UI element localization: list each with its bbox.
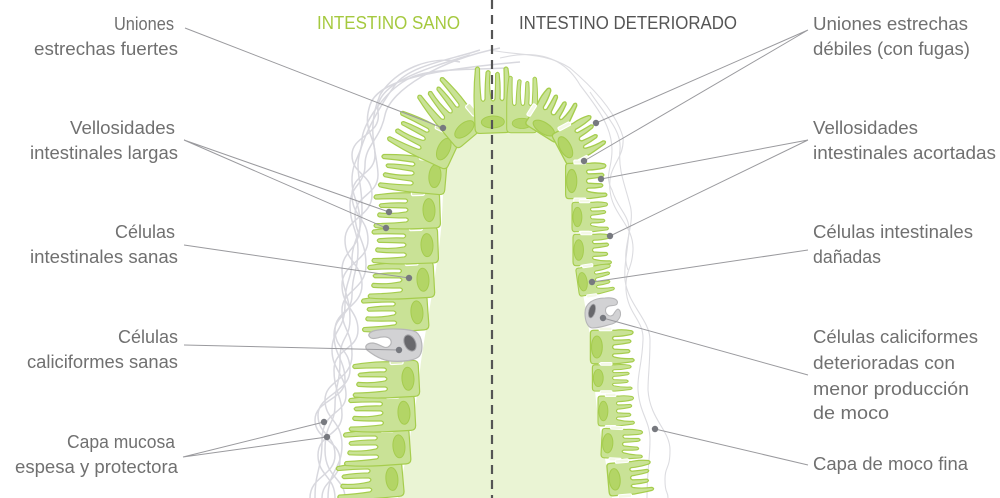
callout: damaged goblet cells: Células caliciformes: [813, 327, 978, 347]
callout: damaged goblet cells: de moco: [813, 403, 889, 423]
callout: healthy intestinal cells: [30, 222, 412, 281]
damaged cell 7: [590, 327, 634, 367]
callout: damaged goblet cells: menor producción: [813, 379, 969, 399]
damaged cell 6: [575, 261, 615, 299]
callout: healthy intestinal cells: intestinales sanas: [30, 247, 178, 267]
healthy cell top left: [386, 107, 463, 170]
callout: thick mucus layer: Capa mucosa: [67, 432, 176, 452]
callout: damaged intestinal cells: [589, 222, 973, 285]
healthy cell 4: [366, 258, 435, 301]
callout: long villi: [30, 118, 392, 231]
callout: thick mucus layer: espesa y protectora: [15, 457, 179, 477]
damaged cell 8: [592, 362, 632, 394]
damaged cell top 1: [522, 84, 582, 145]
healthy cell 6: [351, 357, 420, 400]
damaged cell 9: [598, 393, 634, 429]
damaged cell 11: [606, 457, 654, 498]
healthy cell 7: [347, 391, 416, 434]
panel: thin mucus layer: [490, 50, 670, 498]
callout: damaged intestinal cells: Células intestinales: [813, 222, 973, 242]
panel: thick protective mucus layer: [310, 48, 520, 498]
damaged cell 4: [572, 200, 608, 234]
healthy cell 3: [371, 224, 439, 265]
healthy goblet cell: [366, 329, 422, 361]
healthy cell top: [415, 73, 488, 149]
healthy cell 2: [373, 189, 441, 230]
healthy cell apex: [473, 66, 514, 134]
callout: damaged intestinal cells: dañadas: [813, 247, 881, 267]
healthy cell 5: [360, 291, 429, 334]
damaged cell 3: [566, 160, 607, 202]
callout: healthy intestinal cells: Células: [115, 222, 175, 242]
damaged cell 5: [573, 231, 611, 269]
apex cell: [507, 76, 540, 133]
heading: healthy intestine: INTESTINO SANO: [317, 13, 460, 33]
heading: damaged intestine: INTESTINO DETERIORADO: [519, 13, 737, 33]
callout: damaged goblet cells: deterioradas con: [813, 353, 955, 373]
callout: thick mucus layer: [15, 419, 330, 477]
damaged cell top 2: [550, 111, 609, 169]
center divider: [491, 0, 493, 498]
panel: healthy intestine cells: [335, 66, 514, 498]
callout: weak tight junctions: [581, 14, 970, 164]
callout: long villi: Vellosidades: [70, 118, 175, 138]
callout: thin mucus layer: [652, 426, 969, 474]
callout: weak tight junctions: débiles (con fugas): [813, 39, 970, 59]
callout: thin mucus layer: Capa de moco fina: [813, 454, 969, 474]
healthy cell 1: [378, 150, 448, 195]
damaged cell 10: [601, 425, 644, 463]
callout: shortened villi: Vellosidades: [813, 118, 918, 138]
callout: strong tight junctions: [34, 14, 446, 131]
callout: strong tight junctions: Uniones: [114, 14, 174, 34]
callout: weak tight junctions: Uniones estrechas: [813, 14, 968, 34]
panel: intestinal lumen: [398, 128, 612, 498]
callout: damaged goblet cells: [600, 315, 978, 423]
callout: healthy goblet cells: [27, 327, 402, 372]
panel: damaged intestine cells: [507, 76, 654, 498]
callout: healthy goblet cells: caliciformes sanas: [27, 352, 178, 372]
callout: healthy goblet cells: Células: [118, 327, 178, 347]
callout: long villi: intestinales largas: [30, 143, 178, 163]
damaged goblet cell: [585, 298, 621, 328]
callout: shortened villi: intestinales acortadas: [813, 143, 996, 163]
healthy cell 8: [342, 425, 411, 468]
healthy cell 9: [335, 457, 404, 498]
callout: strong tight junctions: estrechas fuertes: [34, 39, 178, 59]
callout: shortened villi: [598, 118, 996, 239]
